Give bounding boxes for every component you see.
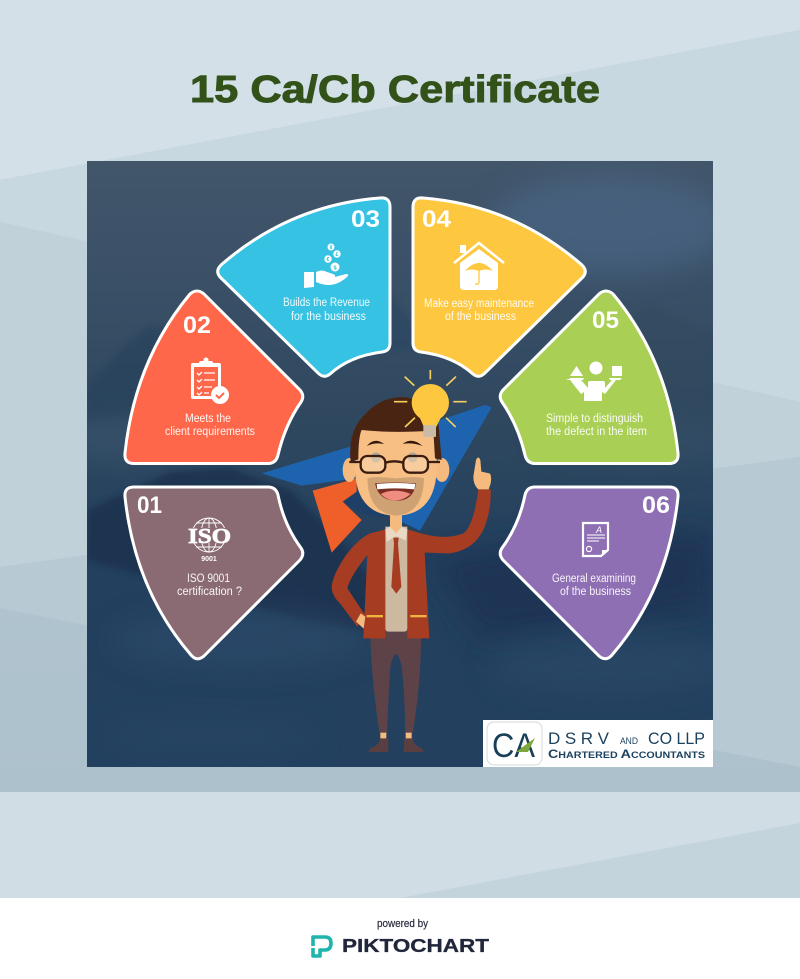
label 05 (546, 413, 647, 438)
icon: ISO globe: 9001 (201, 556, 217, 563)
light bulb (394, 370, 467, 437)
legs and shoes (369, 630, 423, 752)
number 01: 01 (137, 492, 162, 519)
icon: hand with coins: $ (333, 266, 337, 272)
segment 06: examining (500, 487, 678, 659)
icon: hand with coins: ¥ (329, 245, 333, 251)
icon: house with umbrella (454, 243, 504, 290)
label 02: client requirements (165, 426, 255, 438)
firm name: AND (620, 736, 638, 746)
label 03: Builds the Revenue (283, 297, 370, 309)
label 01: ISO 9001 (187, 573, 230, 585)
icon: graded document: A (595, 525, 602, 535)
footer branding (313, 918, 489, 956)
label 01: certification ? (177, 586, 242, 598)
icon: clipboard checklist (191, 358, 229, 404)
icon: ISO globe: ISO (188, 524, 231, 548)
icon: person weighing shapes (566, 362, 622, 401)
label 06: General examining (552, 573, 636, 585)
title: 15 Ca/Cb Certificate (190, 69, 600, 111)
firm name: D S R V (548, 729, 610, 748)
segment 02: client requirements (125, 291, 303, 464)
number 02: 02 (183, 312, 211, 339)
firm name (548, 729, 705, 748)
icon: hand with coins (304, 244, 348, 288)
label 02: Meets the (185, 413, 231, 425)
label 04 (424, 298, 534, 323)
label 01 (177, 573, 242, 598)
mountain photo panel (50, 161, 740, 767)
number 04: 04 (422, 206, 451, 233)
label 04: Make easy maintenance (424, 298, 534, 310)
firm name: CO LLP (648, 729, 705, 748)
segment 05: defect (500, 291, 678, 464)
powered by: powered by (377, 918, 428, 930)
label 03 (283, 297, 370, 323)
raised finger hand (473, 457, 491, 489)
label 06: of the business (560, 586, 631, 598)
number 03: 03 (351, 206, 380, 233)
company logo badge (483, 720, 713, 767)
icon: ISO globe (187, 518, 231, 563)
segment 04: maintenance (413, 198, 585, 376)
label 04: of the business (445, 311, 516, 323)
label 02 (165, 413, 255, 438)
label 05: the defect in the item (546, 426, 647, 438)
segment 03: revenue (218, 198, 390, 376)
number 05: 05 (592, 307, 619, 334)
character: businessman (332, 370, 491, 752)
paper plane behind character (262, 405, 492, 553)
firm descriptor: CHARTERED ACCOUNTANTS (548, 747, 705, 761)
Piktochart wordmark: PIKTOCHART (342, 936, 489, 956)
icon: hand with coins: € (326, 257, 330, 263)
segment 01: ISO 9001 (125, 487, 303, 659)
label 03: for the business (291, 311, 366, 323)
torso and arms (332, 489, 491, 638)
icon: graded document (583, 523, 608, 556)
CA mark: CA (492, 727, 535, 765)
label 06 (552, 573, 636, 598)
head (343, 397, 449, 516)
label 05: Simple to distinguish (546, 413, 643, 425)
number 06: 06 (642, 492, 670, 519)
Piktochart logo icon (313, 937, 331, 956)
icon: hand with coins: £ (335, 252, 339, 258)
